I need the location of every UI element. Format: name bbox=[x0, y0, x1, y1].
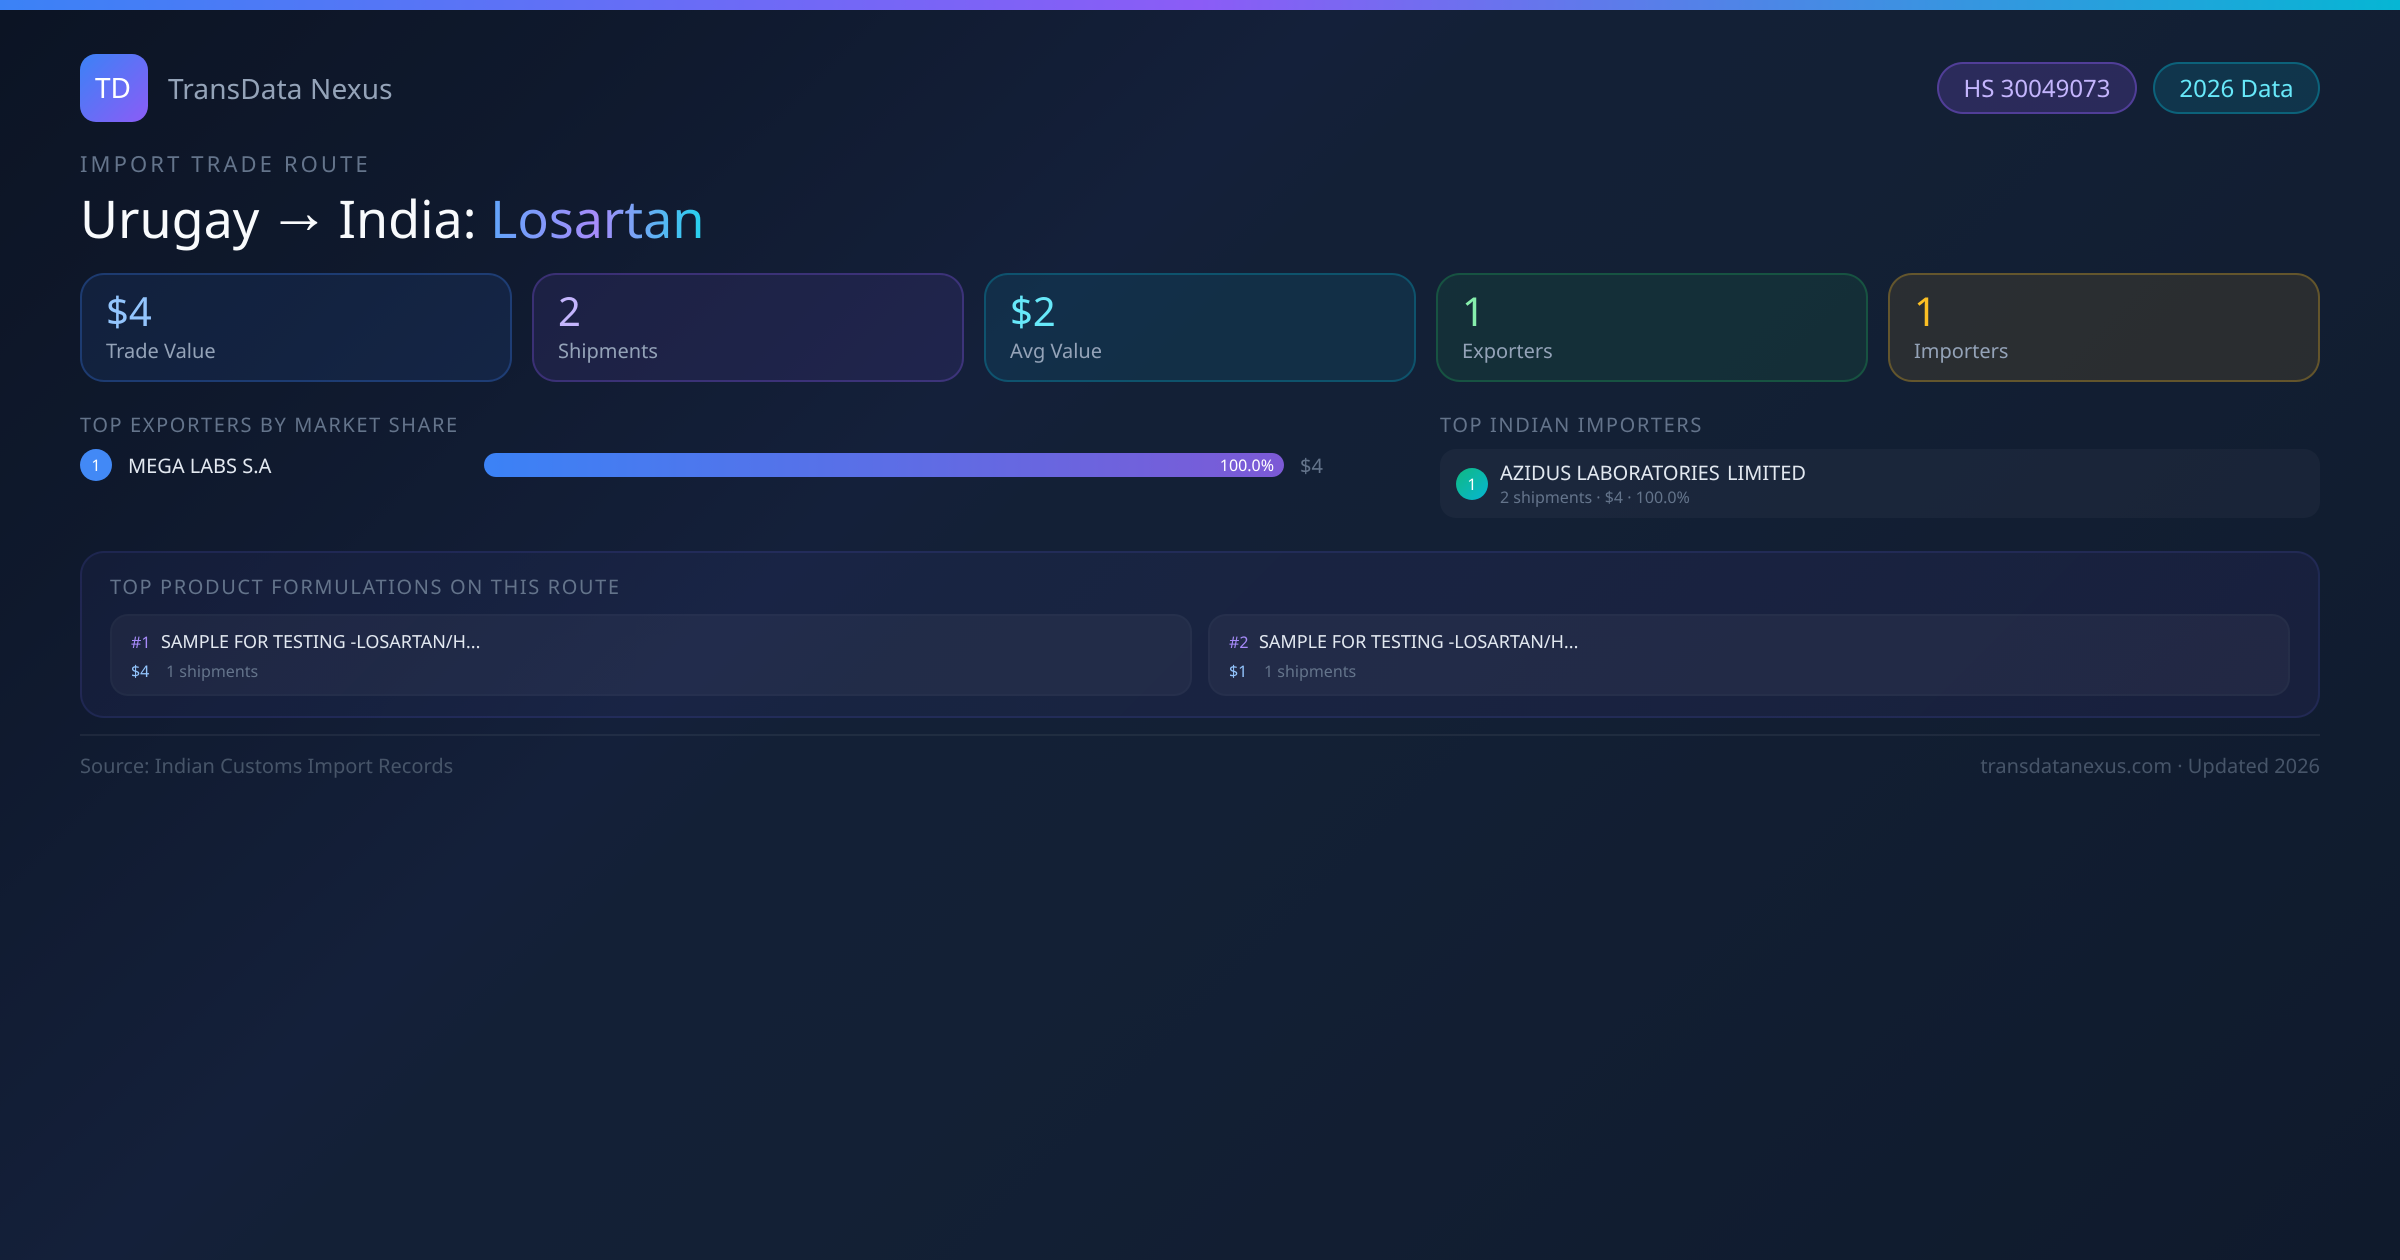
stat card: trade value bbox=[80, 273, 512, 382]
footer source: Source: Indian Customs Import Records bbox=[80, 752, 453, 779]
stat card: average value: $2 bbox=[1010, 283, 1056, 338]
logo icon: TD bbox=[95, 69, 131, 107]
importer details: 2 shipments · $4 · 100.0% bbox=[1500, 486, 1690, 508]
badge: HS code bbox=[1937, 62, 2137, 114]
importer rank badge bbox=[1456, 468, 1488, 500]
badge: data year: 2026 Data bbox=[2179, 72, 2294, 105]
importers heading: TOP INDIAN IMPORTERS bbox=[1440, 411, 1703, 438]
logo icon bbox=[80, 54, 148, 122]
formulation item 1 bbox=[110, 614, 1192, 696]
brand name: TransData Nexus bbox=[168, 70, 393, 108]
badge: data year bbox=[2153, 62, 2320, 114]
stat card: shipments: Shipments bbox=[558, 337, 658, 364]
product name 2: SAMPLE FOR TESTING -LOSARTAN/H... bbox=[1259, 630, 1578, 654]
eyebrow label: IMPORT TRADE ROUTE bbox=[80, 149, 371, 179]
footer site: transdatanexus.com · Updated 2026 bbox=[1980, 752, 2320, 779]
formulation item 2 bbox=[1208, 614, 2290, 696]
stat card: shipments bbox=[532, 273, 964, 382]
rank 2: #2 bbox=[1229, 631, 1248, 653]
exporter value: $4 bbox=[1300, 452, 1323, 479]
stat card: average value bbox=[984, 273, 1416, 382]
shipments 1: 1 shipments bbox=[166, 660, 258, 682]
importer rank badge: 1 bbox=[1467, 473, 1477, 495]
formulations heading: TOP PRODUCT FORMULATIONS ON THIS ROUTE bbox=[110, 573, 621, 600]
stat card: exporters: 1 bbox=[1462, 283, 1485, 338]
value 2: $1 bbox=[1229, 660, 1247, 682]
value 1: $4 bbox=[131, 660, 149, 682]
stat card: trade value: Trade Value bbox=[106, 337, 216, 364]
badge: HS code: HS 30049073 bbox=[1963, 72, 2111, 105]
share percent: 100.0% bbox=[1220, 454, 1274, 476]
stat card: average value: Avg Value bbox=[1010, 337, 1102, 364]
exporters heading: TOP EXPORTERS BY MARKET SHARE bbox=[80, 411, 459, 438]
exporter share bar bbox=[484, 453, 1284, 477]
product name 1: SAMPLE FOR TESTING -LOSARTAN/H... bbox=[161, 630, 480, 654]
stat card: exporters bbox=[1436, 273, 1868, 382]
exporter row bbox=[80, 449, 1323, 481]
exporter rank badge bbox=[80, 449, 112, 481]
stat card: shipments: 2 bbox=[558, 283, 581, 338]
shipments 2: 1 shipments bbox=[1264, 660, 1356, 682]
stat card: importers: 1 bbox=[1914, 283, 1937, 338]
top accent bar bbox=[0, 0, 2400, 10]
stat card: trade value: $4 bbox=[106, 283, 152, 338]
importer name: AZIDUS LABORATORIES LIMITED bbox=[1500, 459, 1806, 486]
exporter rank badge: 1 bbox=[91, 454, 101, 476]
stat card: importers bbox=[1888, 273, 2320, 382]
exporter name: MEGA LABS S.A bbox=[128, 452, 271, 479]
title: Urugay → India: Losartan bbox=[80, 178, 704, 254]
importer row bbox=[1440, 449, 2320, 518]
stat card: importers: Importers bbox=[1914, 337, 2008, 364]
panel: product formulations bbox=[80, 551, 2320, 718]
stat card: exporters: Exporters bbox=[1462, 337, 1553, 364]
rank 1: #1 bbox=[131, 631, 150, 653]
